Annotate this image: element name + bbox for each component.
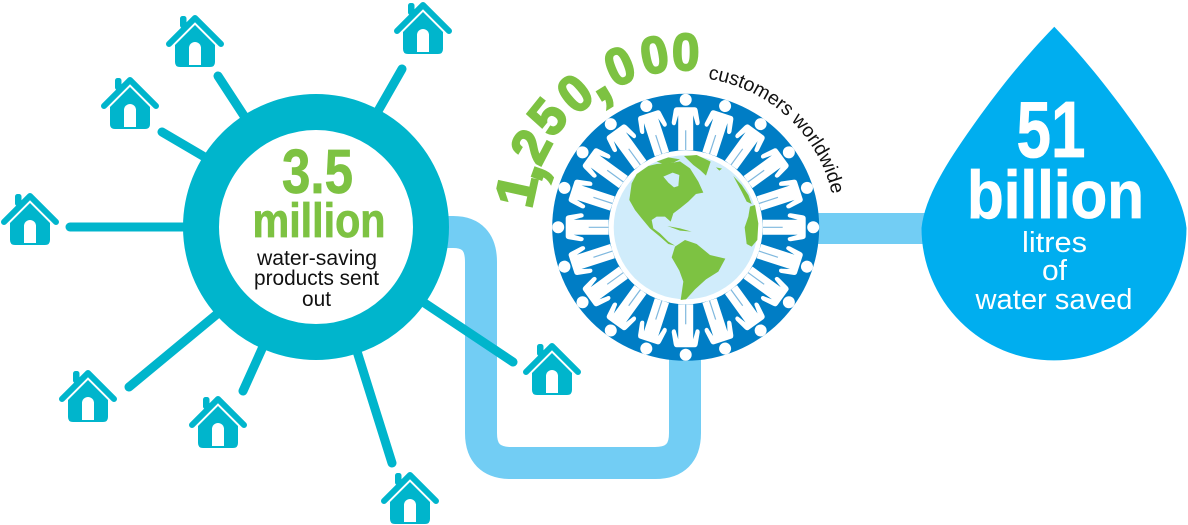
- icon: house: [4, 194, 56, 245]
- figure: 1,250,000 on curve: 5: [516, 88, 579, 146]
- figure: 1,250,000 on curve: 1: [482, 168, 549, 212]
- caption: litres of water saved: of: [1042, 255, 1068, 287]
- figure: 1,250,000 on curve: 2: [498, 120, 563, 172]
- icon: house: [397, 3, 449, 54]
- caption: litres of water saved: [974, 227, 1132, 316]
- figure: billion: billion: [967, 157, 1144, 233]
- caption: customers worldwide on curve: customers worldwide: [710, 69, 842, 193]
- caption: litres of water saved: water saved: [974, 284, 1132, 316]
- spokes: lines linking ring to houses: [70, 69, 513, 463]
- figure: 1,250,000 on curve: ,: [568, 43, 621, 115]
- caption: litres of water saved: litres: [1022, 227, 1087, 259]
- teal ring with products statistic: [201, 112, 431, 342]
- figure: 1,250,000 on curve: [482, 23, 699, 212]
- caption: water-saving products sent out: products sent: [254, 267, 379, 290]
- water drop with litres saved: [922, 27, 1186, 360]
- globe disc ringed with people: [482, 23, 842, 361]
- caption: water-saving products sent out: water-saving: [256, 247, 377, 270]
- figure: 1,250,000 on curve: 0: [672, 23, 699, 81]
- icon: house: [526, 344, 578, 395]
- icon: house: [192, 397, 244, 448]
- figure: 1,250,000 on curve: 0: [636, 24, 673, 86]
- figure: 1,250,000 on curve: 0: [546, 62, 604, 125]
- figure: million: million: [252, 195, 386, 248]
- figure: 51: 51: [1016, 85, 1086, 174]
- icon: house: [384, 473, 436, 524]
- icon: house: [62, 371, 114, 422]
- figure: 3.5: 3.5: [282, 138, 353, 207]
- pipe: globe to water drop: [810, 213, 935, 244]
- figure: 1,250,000 on curve: ,: [484, 147, 559, 188]
- icon: house: [169, 16, 221, 67]
- houses around the ring: [4, 3, 578, 524]
- pipe: winding water pipe between rings: [440, 232, 685, 463]
- figure: 1,250,000 on curve: 0: [596, 34, 643, 98]
- icon: continents on globe: [629, 155, 758, 300]
- caption: water-saving products sent out: out: [302, 288, 331, 311]
- icons: ring of people: [552, 94, 819, 361]
- caption: water-saving products sent out: [254, 247, 379, 311]
- icon: house: [104, 78, 156, 129]
